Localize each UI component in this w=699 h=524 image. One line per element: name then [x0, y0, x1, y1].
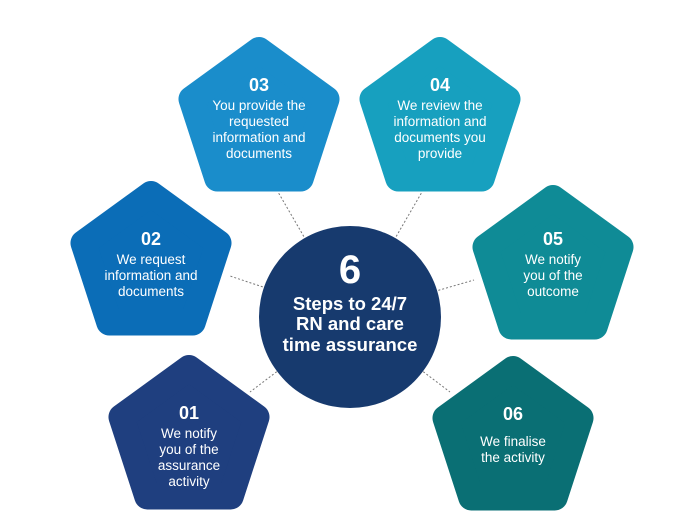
step 03: You provide the: [212, 98, 306, 113]
step 05: 05: [543, 229, 563, 249]
step 06: 06: [503, 404, 523, 424]
step 05: We notify: [525, 252, 581, 267]
step 06: We finalise: [480, 434, 546, 449]
step 02: We request: [117, 252, 186, 267]
step 04: documents you: [394, 130, 486, 145]
step 01: [121, 368, 257, 496]
step 06: the activity: [481, 450, 545, 465]
center circle: [259, 226, 441, 408]
step 03: [191, 50, 327, 178]
step 02: information and: [104, 268, 198, 283]
step 01: 01: [179, 403, 199, 423]
center circle: Steps to 24/7: [293, 293, 407, 314]
step 05: [485, 198, 621, 326]
step 03: requested: [229, 114, 289, 129]
step 03: 03: [249, 75, 269, 95]
step 04: We review the: [397, 98, 483, 113]
step 01: you of the: [159, 442, 219, 457]
center circle: 6: [339, 248, 361, 292]
step 04: 04: [430, 75, 450, 95]
step 02: documents: [118, 284, 184, 299]
step 01: We notify: [161, 426, 217, 441]
step 01: activity: [168, 474, 210, 489]
step 05: outcome: [527, 284, 579, 299]
step 02: 02: [141, 229, 161, 249]
center circle: RN and care: [296, 313, 404, 334]
step 04: [372, 50, 508, 178]
step 04: provide: [418, 146, 462, 161]
step 04: information and: [393, 114, 487, 129]
step 02: [83, 194, 219, 322]
step 01: assurance: [158, 458, 220, 473]
step 03: documents: [226, 146, 292, 161]
connector lines: [230, 192, 474, 392]
step 05: you of the: [523, 268, 583, 283]
center circle: time assurance: [283, 334, 417, 355]
step 06: [445, 369, 581, 497]
step 03: information and: [212, 130, 306, 145]
